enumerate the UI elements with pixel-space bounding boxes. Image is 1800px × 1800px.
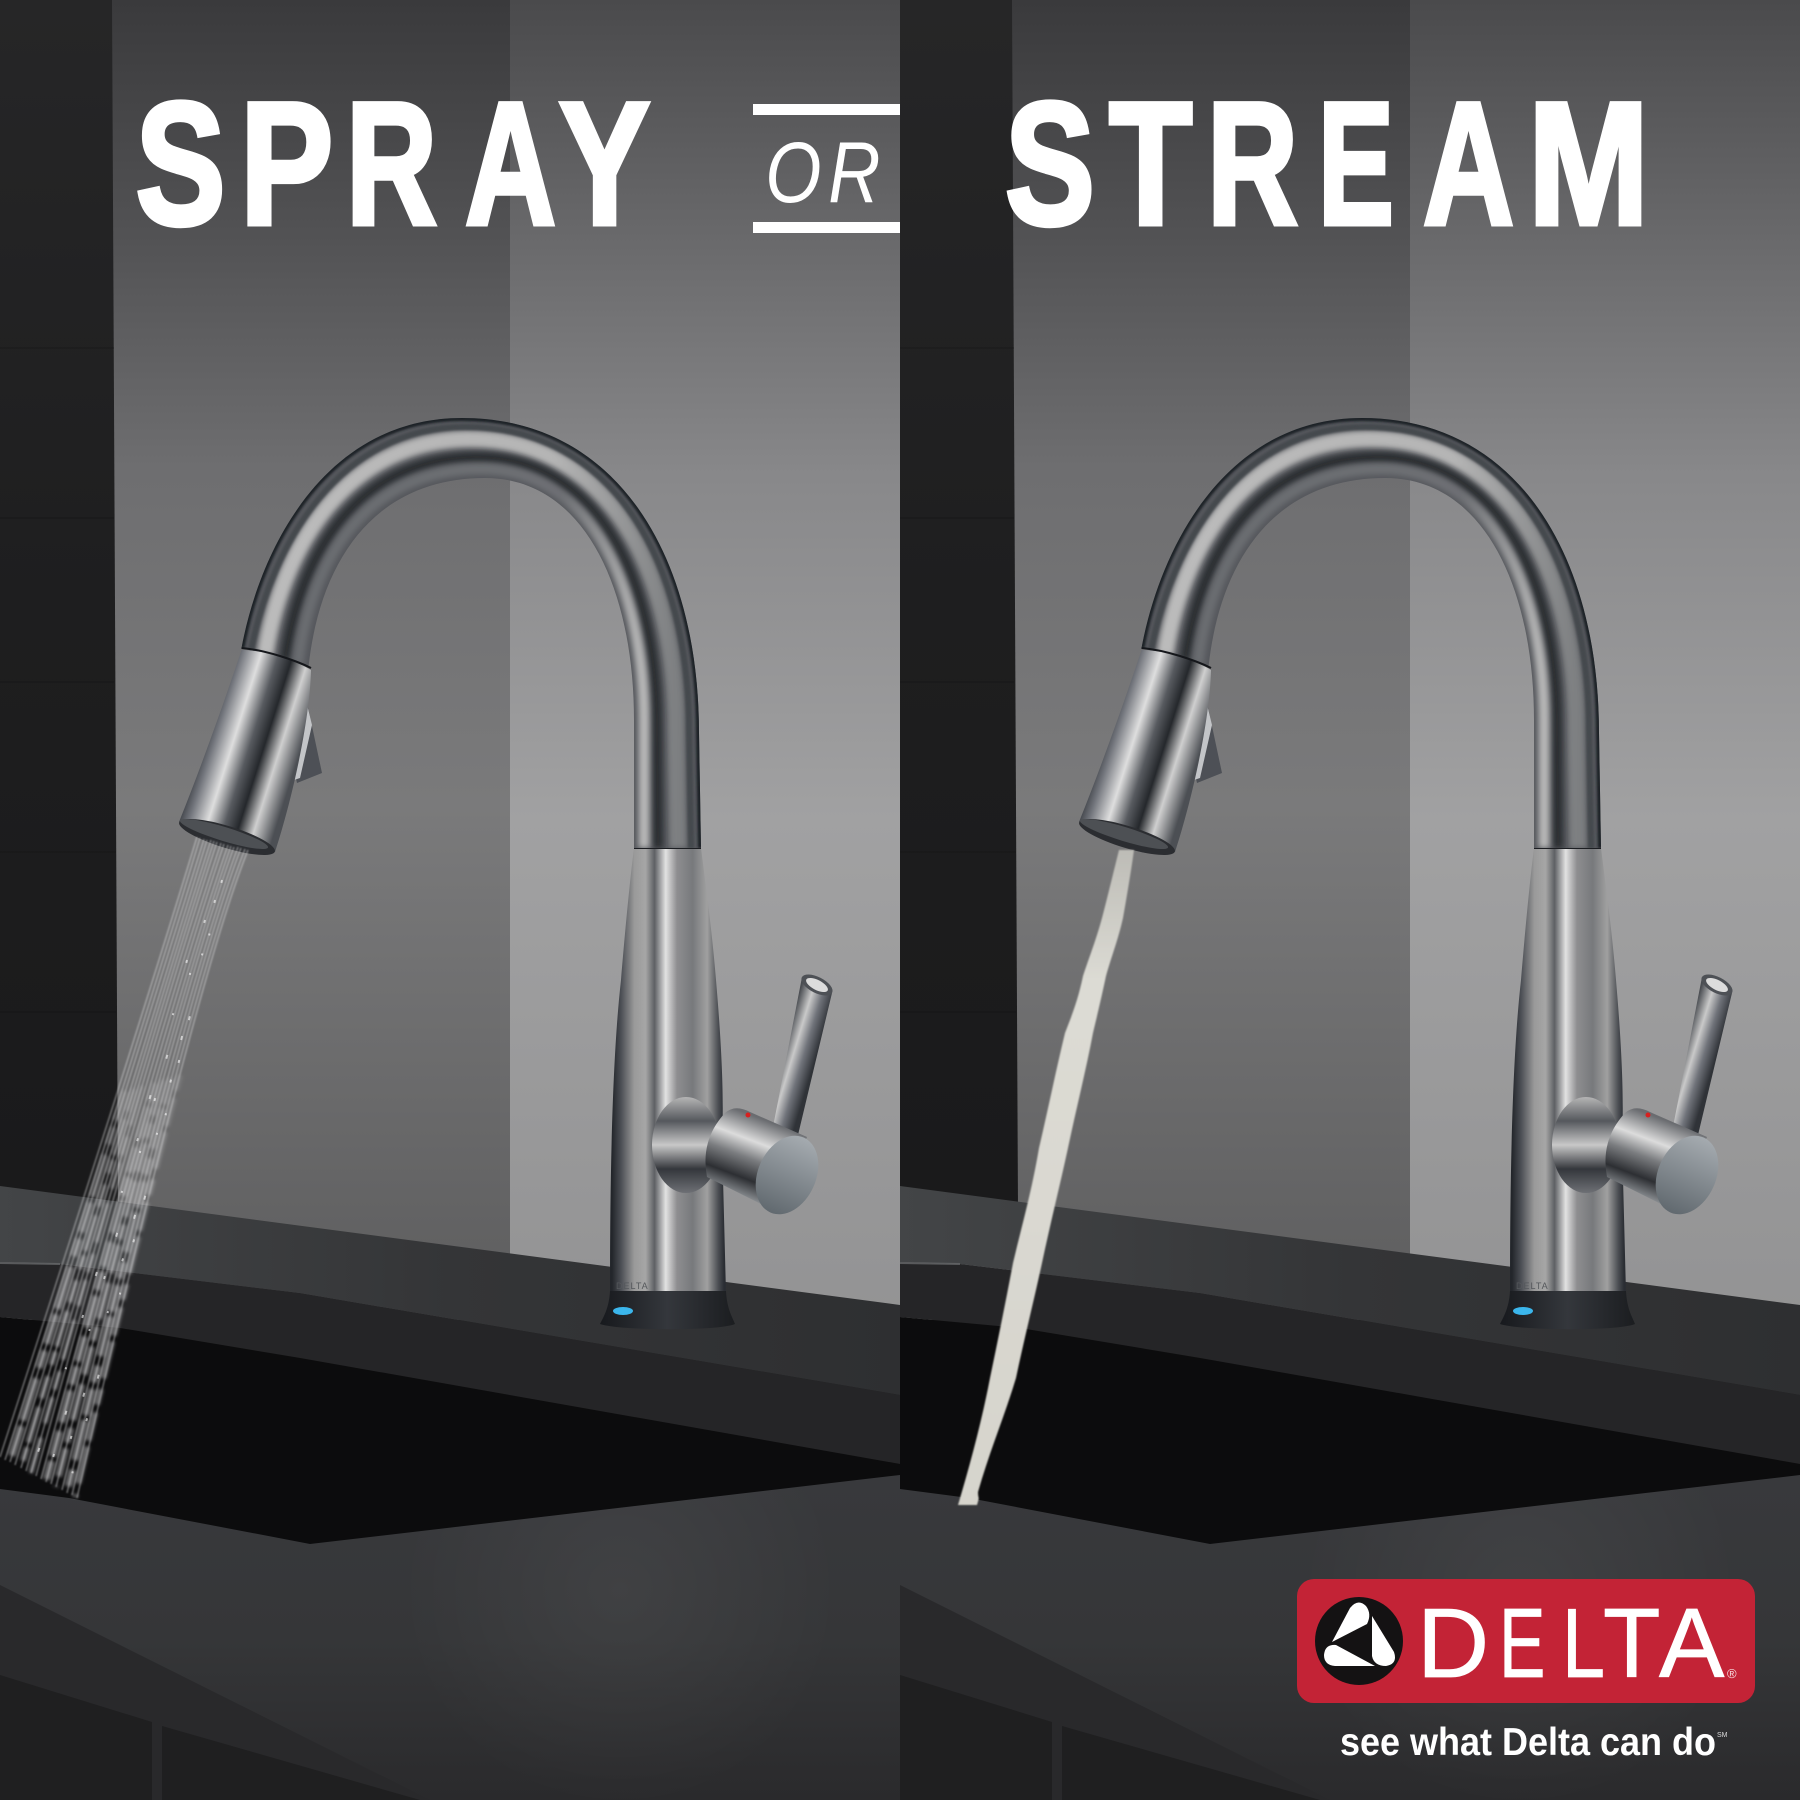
icon: stream faucet [1076,418,1736,1329]
stream water [958,850,1134,1505]
tagline: see what Delta can do [1340,1721,1716,1764]
wordmark: DELTA: A [1659,1588,1725,1698]
title: STREAM: S [1005,67,1095,262]
title: SPRAY: R [346,67,437,262]
title: SPRAY [136,66,650,262]
icon: Delta triangle mark [1315,1597,1403,1685]
tagline: SM [1717,1732,1728,1739]
wordmark: DELTA: E [1499,1589,1545,1699]
icon: spray faucet [176,418,836,1329]
wordmark: DELTA: D [1417,1588,1489,1698]
title: SPRAY: Y [559,67,650,262]
wordmark: DELTA: T [1603,1589,1660,1698]
title: STREAM: E [1318,66,1394,262]
panel: spray background [0,0,900,1800]
title: SPRAY: P [240,66,333,262]
title: STREAM: A [1423,67,1514,262]
Delta logo [1297,1579,1755,1703]
title: SPRAY: A [465,67,556,262]
Delta logo: ® [1727,1666,1737,1681]
wordmark: DELTA [1417,1588,1725,1699]
title: STREAM: R [1207,67,1298,262]
OR divider: OR [765,124,880,220]
wordmark: DELTA: L [1562,1588,1605,1698]
title: SPRAY: S [136,67,225,262]
panel: stream background [900,0,1800,1800]
title: STREAM [1005,66,1649,262]
title: STREAM: M [1528,66,1649,262]
OR divider [753,104,900,233]
title: STREAM: T [1109,67,1192,262]
spray water [0,837,248,1498]
